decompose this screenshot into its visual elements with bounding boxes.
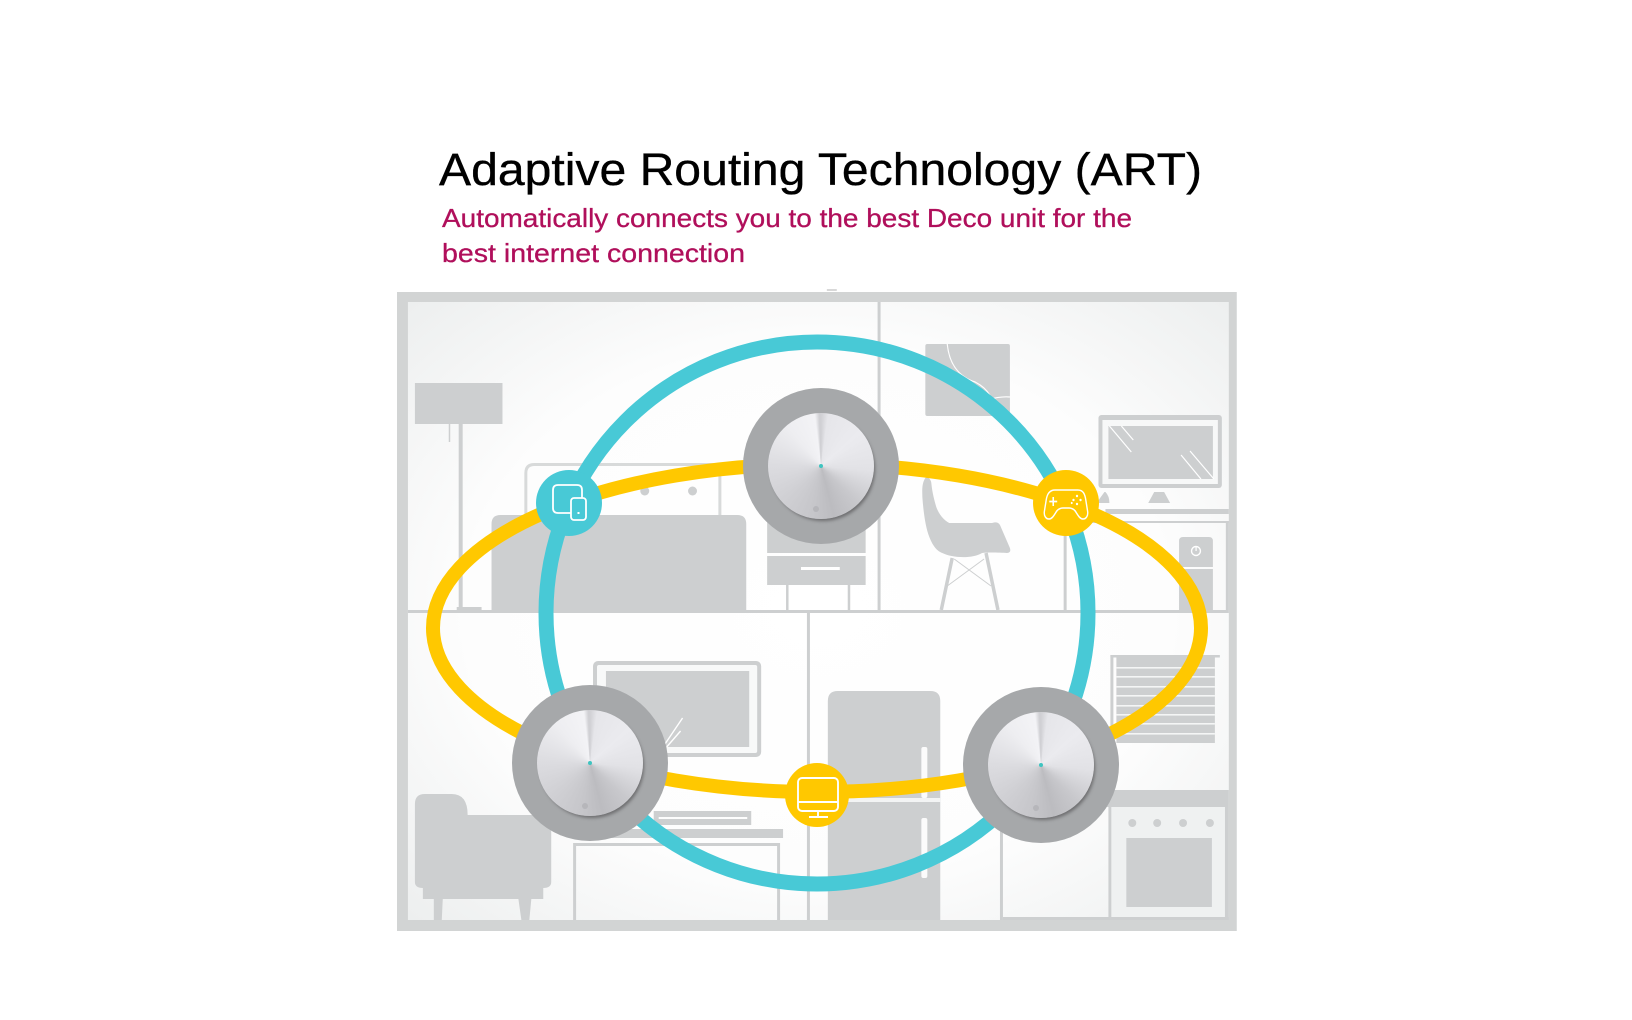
icon: desktop monitor — [785, 763, 849, 827]
sofa — [492, 463, 758, 610]
oven — [1000, 790, 1229, 920]
lower television — [593, 661, 761, 757]
icon: game controller — [1033, 470, 1099, 536]
floor lamp — [415, 383, 502, 610]
deco unit: top — [743, 388, 899, 544]
wall art — [925, 344, 1010, 416]
deco unit: right — [963, 687, 1119, 843]
subtitle — [442, 203, 1132, 268]
lower desk — [573, 811, 783, 920]
yellow ring — [433, 464, 1201, 792]
blinds — [1110, 655, 1220, 743]
walls — [408, 610, 1229, 613]
fridge — [828, 691, 940, 920]
upper monitor — [1096, 415, 1222, 503]
desk and computer tower — [1064, 509, 1229, 610]
house floor plan — [397, 289, 1237, 931]
icon: tablet and phone — [536, 470, 602, 536]
subtitle: Automatically connects you to the best Deco unit for the — [442, 203, 1132, 233]
nightstand — [767, 515, 866, 610]
subtitle: best internet connection — [442, 238, 745, 268]
deco unit: left — [512, 685, 668, 841]
title: Adaptive Routing Technology (ART) — [439, 144, 1202, 195]
armchair — [415, 794, 551, 920]
teal ring — [546, 342, 1088, 884]
chair — [922, 477, 1010, 610]
